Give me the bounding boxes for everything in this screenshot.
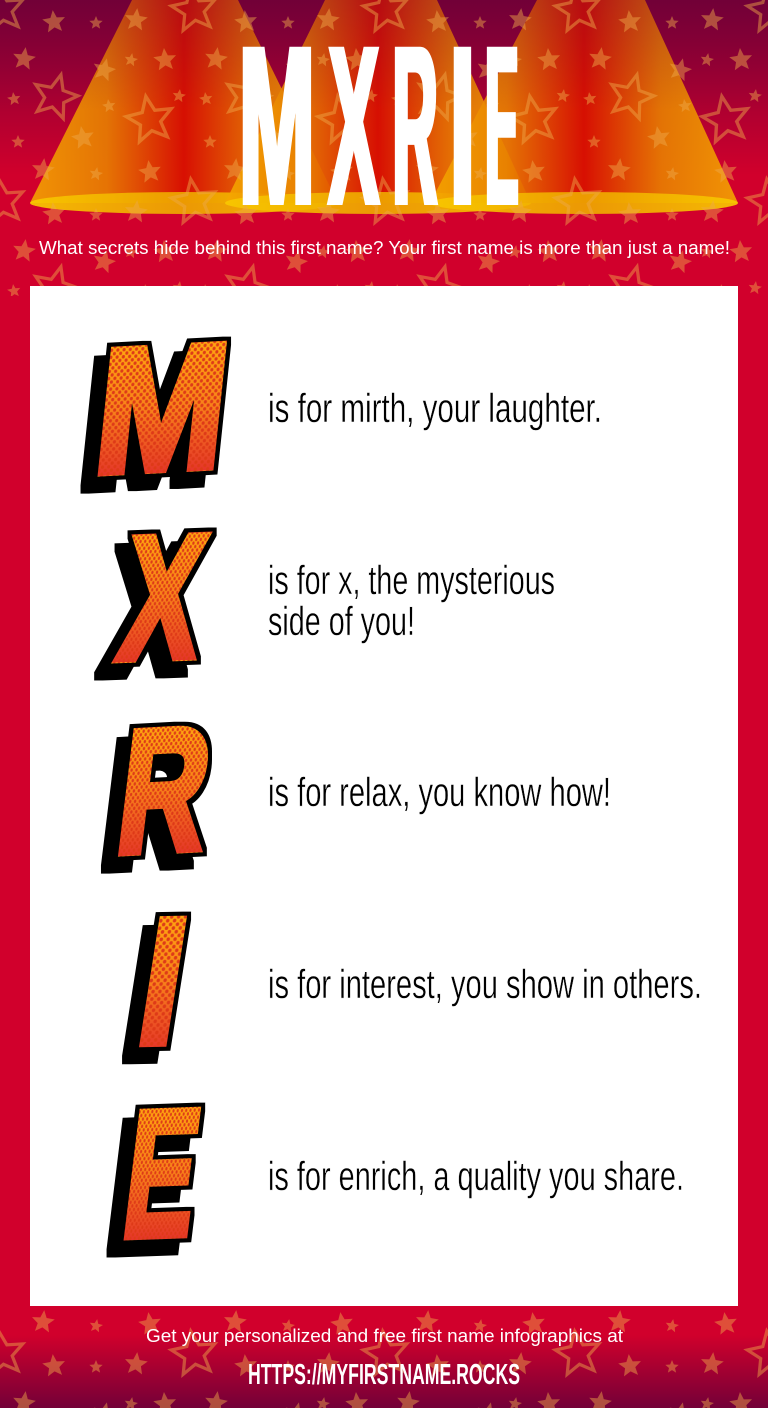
text: R line: is for relax, you know how!	[268, 769, 611, 815]
title: MXRIE: I	[450, 0, 475, 255]
text: X lines: side of you!	[268, 598, 415, 644]
title: MXRIE: M	[239, 0, 315, 255]
footer text: Get your personalized and free first name infographics at	[146, 1325, 623, 1346]
footer url: HTTPS://MYFIRSTNAME.ROCKS	[248, 1359, 520, 1391]
panel: white card	[30, 286, 738, 1306]
icon: comic letter R: R	[108, 691, 220, 891]
spotlight: left cone	[30, 0, 338, 214]
icon: comic letter M: M	[87, 306, 238, 511]
title: MXRIE: R	[393, 0, 438, 254]
top shading over cones	[0, 0, 768, 110]
row: M	[87, 306, 602, 511]
row: E	[114, 1071, 684, 1276]
text: X lines: is for x, the mysterious	[268, 557, 555, 603]
text: M line: is for mirth, your laughter.	[268, 385, 602, 431]
title: MXRIE	[239, 0, 518, 255]
title: MXRIE: E	[486, 0, 518, 255]
spotlight cones	[30, 0, 738, 214]
row: X	[111, 498, 555, 696]
spotlight: middle cone	[225, 0, 531, 214]
icon: comic letter X: X	[111, 498, 216, 696]
row: R	[108, 691, 611, 891]
row: I	[123, 877, 702, 1086]
spotlight: right cone	[430, 0, 738, 214]
icon: comic letter E: E	[114, 1071, 210, 1276]
title: MXRIE: X	[328, 0, 380, 255]
subtitle: What secrets hide behind this first name? Your first name is more than just a name!	[39, 237, 730, 258]
text: X lines	[268, 557, 555, 644]
icon: comic letter I: I	[123, 877, 203, 1086]
